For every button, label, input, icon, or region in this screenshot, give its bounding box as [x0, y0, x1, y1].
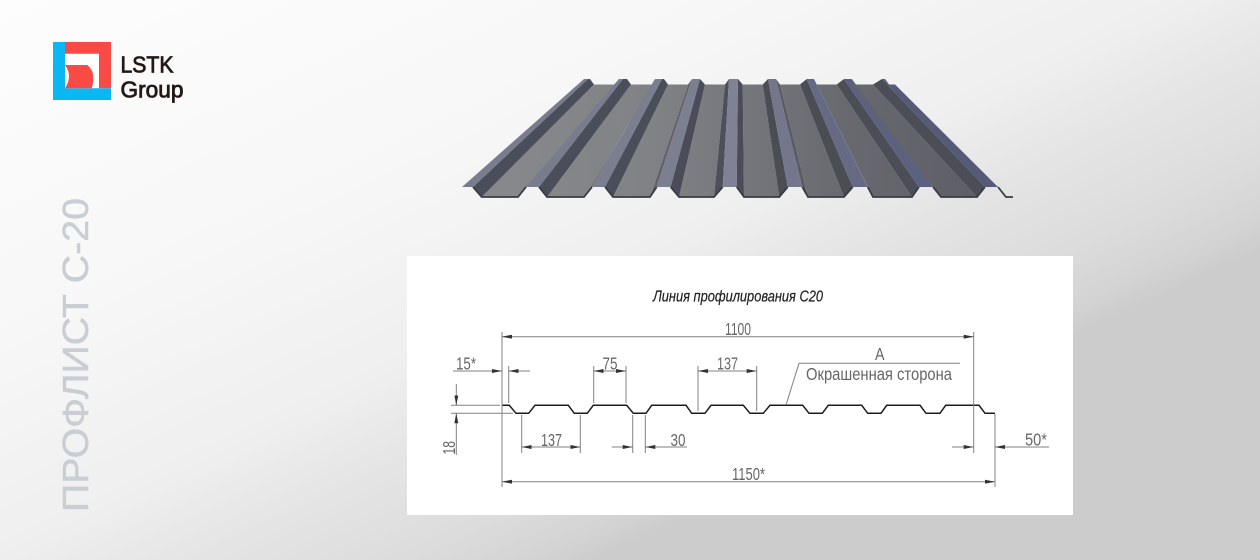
dimension 15*	[453, 354, 530, 374]
extension lines	[451, 332, 995, 487]
dimension 18	[439, 384, 459, 455]
dimension 137 top	[698, 354, 757, 374]
logo text	[120, 52, 184, 103]
callout: painted side: А	[875, 344, 885, 364]
dimension 15*: 15*	[456, 354, 476, 374]
profile cross-section	[502, 405, 995, 413]
callout: painted side	[786, 344, 960, 405]
drawing title: Линия профилирования С20	[652, 288, 823, 306]
callout: painted side: Окрашенная сторона	[806, 364, 952, 384]
dimension 1150*: 1150*	[732, 464, 765, 484]
corrugated sheet 3D illustration	[462, 79, 1013, 197]
dimension 50*	[952, 430, 1049, 450]
logo mark	[53, 42, 111, 100]
dimension 137 bottom	[522, 430, 580, 450]
logo: LSTK Group	[53, 42, 184, 103]
rib left webs	[518, 79, 985, 197]
rib crests	[462, 79, 998, 187]
dimension 137 top: 137	[717, 354, 738, 374]
dimension 75: 75	[602, 354, 618, 374]
logo text: LSTK	[120, 52, 174, 78]
dimension 30	[612, 430, 687, 450]
white panel	[407, 256, 1073, 515]
panel: profile drawing	[407, 256, 1073, 515]
dimension 50*: 50*	[1025, 430, 1047, 450]
dimension 137 bottom: 137	[541, 430, 562, 450]
dimension 75	[594, 354, 626, 374]
rib right webs	[473, 79, 941, 197]
dimension 30: 30	[670, 430, 686, 450]
vertical title: ПРОФЛИСТ С-20: ПРОФЛИСТ С-20	[55, 198, 96, 512]
flat sheet sections	[482, 84, 977, 197]
dimension 1100: 1100	[725, 319, 751, 339]
logo text: Group	[120, 77, 184, 103]
front edge	[473, 187, 1013, 197]
dimension 18: 18	[439, 441, 459, 454]
